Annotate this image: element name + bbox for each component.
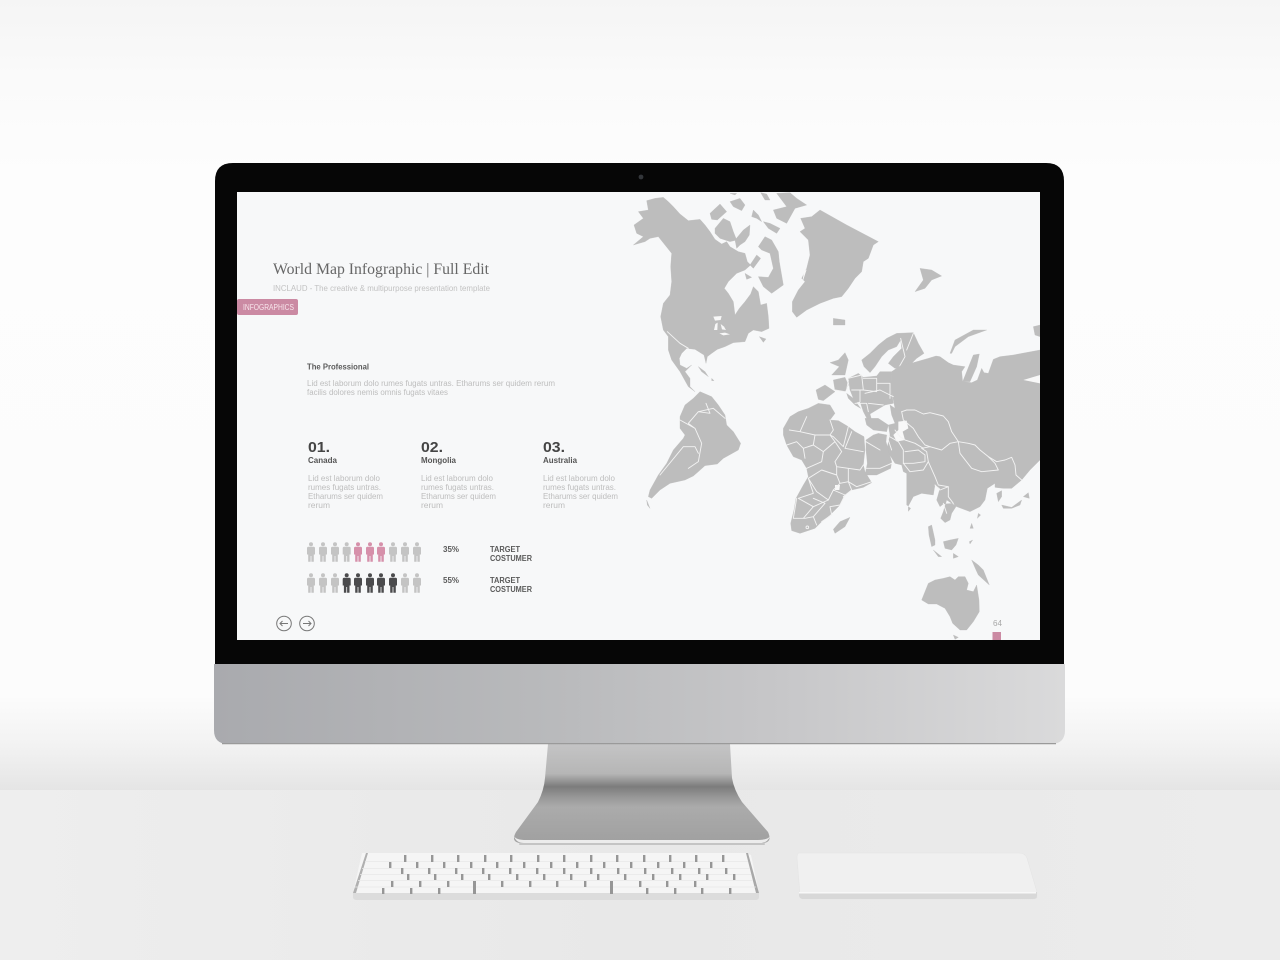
intro text block: The Professional [307,362,369,372]
item 03: Australia: Lid est laborum dolo [543,474,616,483]
monitor stand [514,744,770,845]
item 02: Mongolia: Lid est laborum dolo [421,474,494,483]
intro text block: Lid est laborum dolo rumes fugats untras. Etharums ser quidem rerum [307,379,555,388]
item 02: Mongolia: rerum [421,501,443,510]
pictogram row: 35% target: TARGET [490,545,520,554]
icon: previous arrow [277,616,291,631]
map: japan and korea [977,491,1029,518]
item 01: Canada: rerum [308,501,330,510]
item 02: Mongolia [421,439,496,510]
item 02: Mongolia: Mongolia [421,456,457,465]
monitor body [214,163,1065,744]
pictogram row: 55% target: COSTUMER [490,585,532,594]
icon: next arrow [300,616,314,631]
trackpad [797,853,1037,899]
item 02: Mongolia: Etharums ser quidem [421,492,496,501]
page number: 64 [993,619,1003,628]
item 01: Canada: Lid est laborum dolo [308,474,381,483]
pictogram row: 55% target: TARGET [490,576,520,585]
item 03: Australia: rerum [543,501,565,510]
item 03: Australia: 03. [543,439,565,456]
pictogram row: 35% target: 35% [443,544,460,554]
title: World Map Infographic | Full Edit [273,261,490,278]
badge: infographics [237,299,298,315]
item 01: Canada: rumes fugats untras. [308,483,381,492]
map: eurasia [816,350,1040,523]
subtitle: INCLAUD - The creative & multipurpose presentation template [273,283,490,293]
item 02: Mongolia: rumes fugats untras. [421,483,494,492]
screen: slide [237,192,1040,640]
map: north america, greenland, arctic and north atlantic [633,193,1040,392]
map: africa and arabia [783,403,892,533]
world map [633,193,1040,639]
badge: infographics: INFOGRAPHICS [243,303,294,312]
keyboard [353,853,759,900]
pictogram row: 55% target [307,573,532,594]
page number [992,619,1003,640]
pictogram row: 55% target: 55% [443,575,460,585]
item 03: Australia: rumes fugats untras. [543,483,616,492]
intro text block: facilis dolores nemis omnis fugats vitaes [307,388,448,397]
item 01: Canada [308,439,383,510]
item 03: Australia: Australia [543,456,578,465]
item 03: Australia [543,439,618,510]
intro text block [307,362,555,397]
pictogram row: 35% target [307,542,532,563]
item 02: Mongolia: 02. [421,439,443,456]
item 01: Canada: Etharums ser quidem [308,492,383,501]
item 01: Canada: Canada [308,456,338,465]
item 01: Canada: 01. [308,439,330,456]
item 03: Australia: Etharums ser quidem [543,492,618,501]
map: south america and oceania [647,392,989,639]
pictogram row: 35% target: COSTUMER [490,554,532,563]
